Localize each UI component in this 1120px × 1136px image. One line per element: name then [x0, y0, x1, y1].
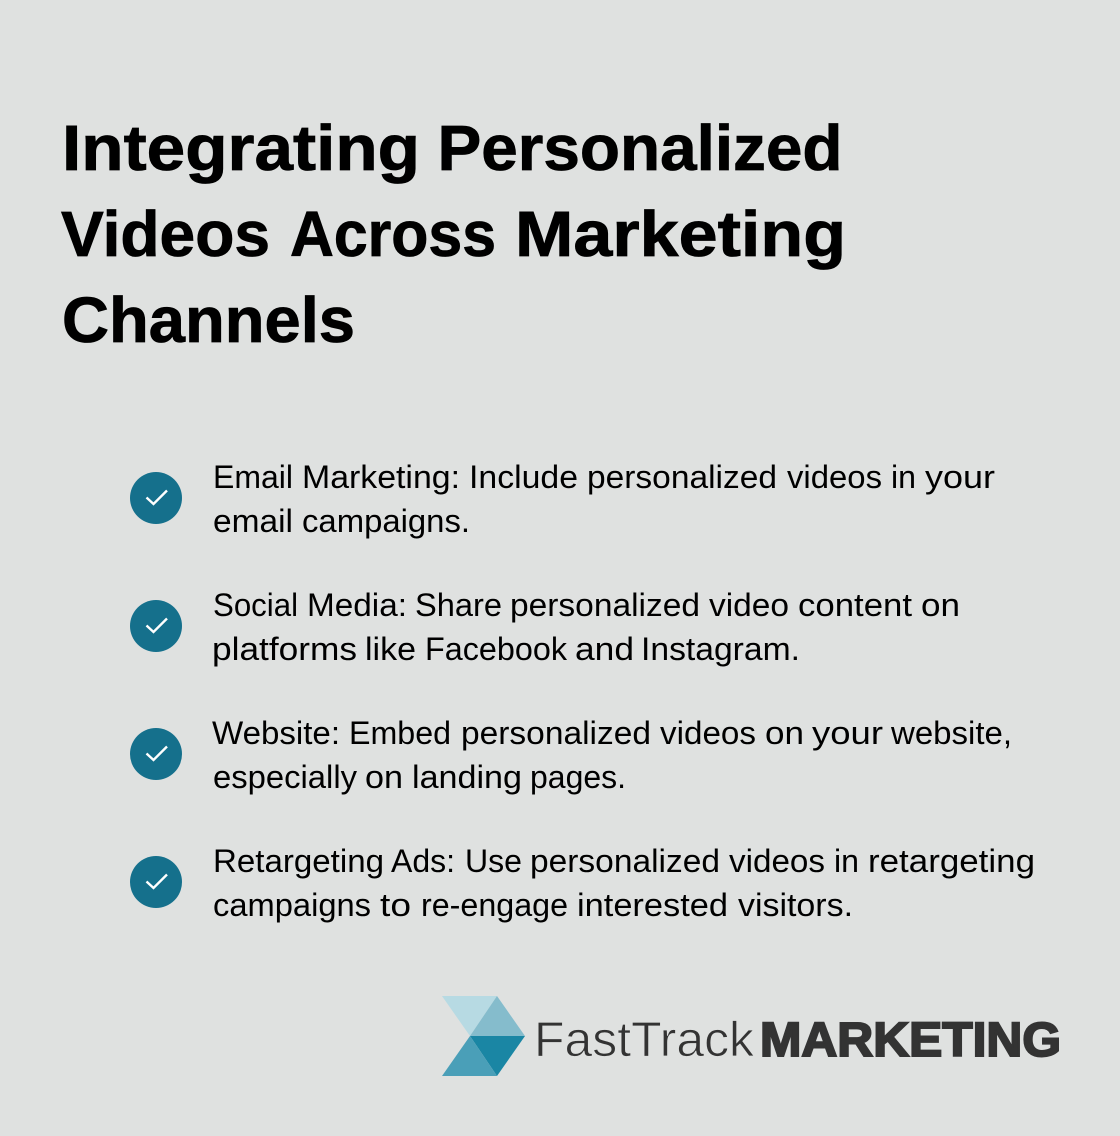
item: social media: [130, 587, 960, 667]
logo wordmark: MARKETING: [760, 1014, 1061, 1067]
text: social media: and: [575, 631, 634, 667]
text: website: personalized: [461, 715, 651, 751]
text: email marketing: Include: [469, 459, 578, 495]
icon: check circle: [130, 472, 182, 524]
text: retargeting ads: visitors.: [738, 887, 853, 923]
text: retargeting ads: retargeting: [868, 843, 1035, 879]
text: social media: Media:: [307, 587, 407, 623]
title: Integrating: [62, 112, 420, 184]
text: email marketing: [213, 459, 995, 539]
text: retargeting ads: in: [834, 843, 859, 879]
text: retargeting ads: [213, 843, 1035, 923]
text: social media: Social: [213, 587, 298, 623]
text: email marketing: campaigns.: [302, 503, 470, 539]
text: retargeting ads: personalized: [530, 843, 720, 879]
text: retargeting ads: to: [380, 887, 411, 923]
text: website: on: [365, 759, 403, 795]
text: website: Embed: [349, 715, 451, 751]
text: email marketing: videos: [787, 459, 882, 495]
text: retargeting ads: Use: [465, 843, 522, 879]
text: email marketing: in: [891, 459, 916, 495]
text: website: landing: [412, 759, 522, 795]
text: social media: Facebook: [425, 631, 568, 667]
text: retargeting ads: interested: [577, 887, 728, 923]
text: email marketing: your: [925, 459, 995, 495]
text: social media: [212, 587, 960, 667]
logo wordmark: FastTrack: [534, 1013, 755, 1067]
text: social media: content: [798, 587, 912, 623]
text: website: videos: [660, 715, 756, 751]
text: email marketing: email: [213, 503, 293, 539]
title: Marketing: [515, 198, 846, 270]
text: social media: video: [709, 587, 789, 623]
checklist: [130, 459, 1035, 923]
title: Personalized: [438, 112, 842, 184]
text: website: especially: [213, 759, 357, 795]
text: retargeting ads: Retargeting: [213, 843, 384, 879]
text: social media: like: [365, 631, 416, 667]
text: social media: on: [921, 587, 960, 623]
text: email marketing: personalized: [587, 459, 777, 495]
item: retargeting ads: [130, 843, 1035, 923]
text: retargeting ads: videos: [729, 843, 825, 879]
logo: [442, 996, 1061, 1076]
text: retargeting ads: campaigns: [213, 887, 371, 923]
text: website: pages.: [530, 759, 626, 795]
text: retargeting ads: re-engage: [421, 887, 568, 923]
title: Across: [290, 198, 496, 270]
text: social media: Instagram.: [641, 631, 800, 667]
text: website: on: [765, 715, 804, 751]
text: website: Website:: [212, 715, 340, 751]
item: website: [130, 715, 1012, 795]
text: social media: platforms: [212, 631, 357, 667]
text: email marketing: Email: [213, 459, 293, 495]
icon: check circle: [130, 600, 182, 652]
title: [61, 112, 846, 356]
item: email marketing: [130, 459, 995, 539]
text: social media: personalized: [510, 587, 700, 623]
text: email marketing: Marketing:: [302, 459, 460, 495]
text: website: website,: [890, 715, 1012, 751]
icon: check circle: [130, 728, 182, 780]
text: retargeting ads: Ads:: [391, 843, 455, 879]
text: website: your: [812, 715, 883, 751]
logo wordmark: [534, 1013, 1061, 1067]
title: Videos: [61, 198, 270, 270]
icon: check circle: [130, 856, 182, 908]
title: Channels: [62, 284, 355, 356]
text: social media: Share: [415, 587, 502, 623]
text: website: [212, 715, 1012, 795]
icon: logo mark: [442, 996, 525, 1076]
